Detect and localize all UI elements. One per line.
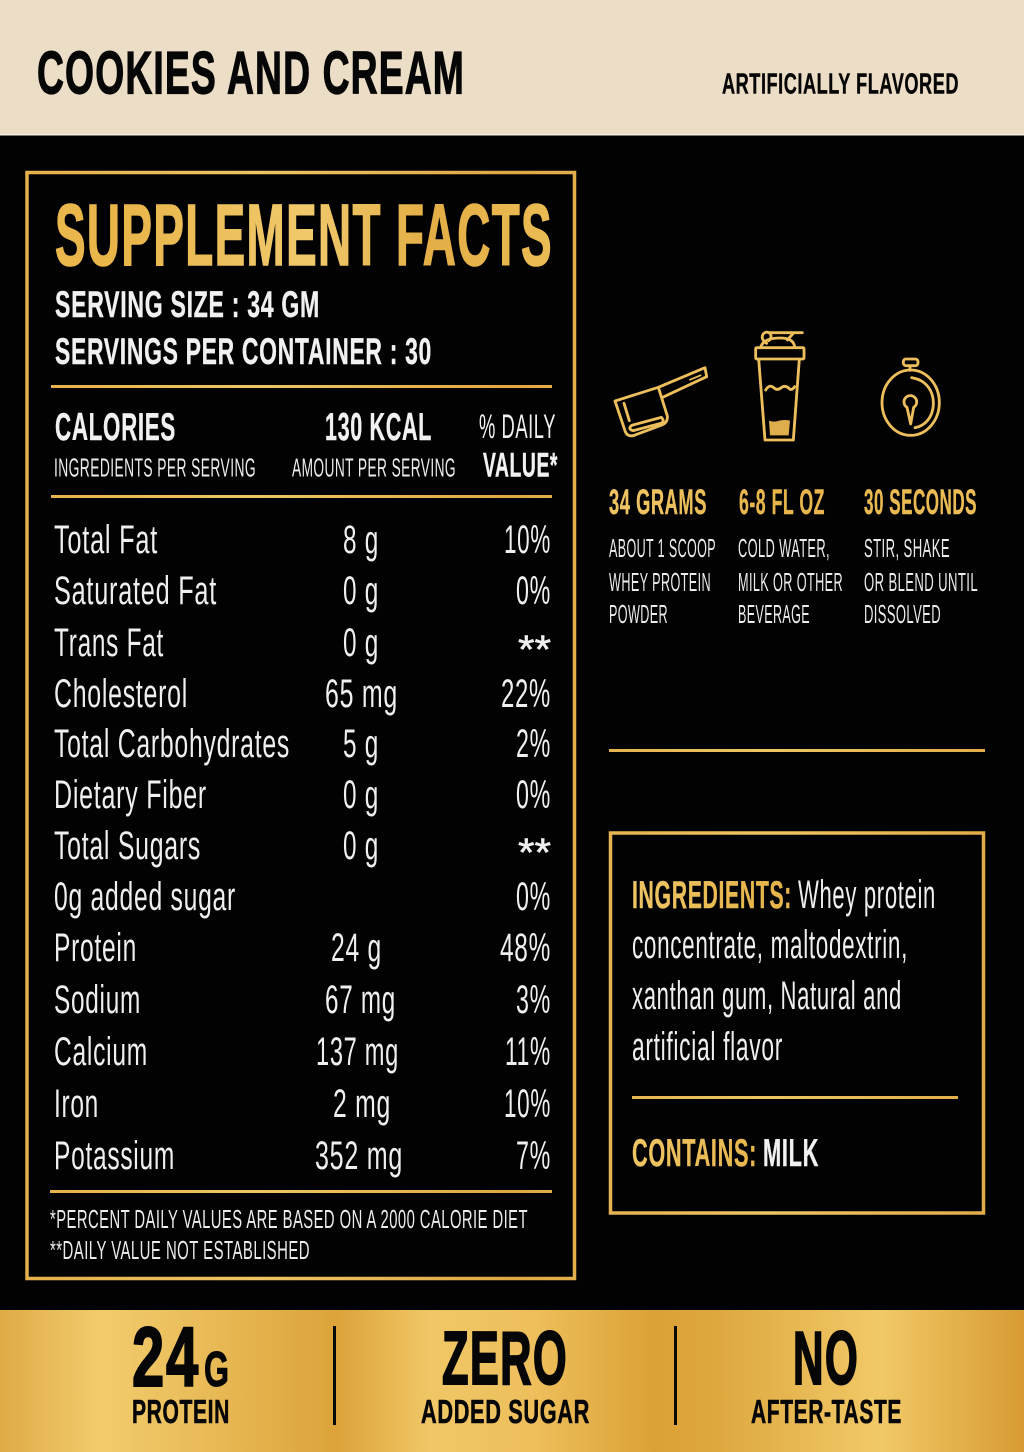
nutrient table: Protein	[54, 926, 137, 970]
panel: supplement facts	[27, 172, 574, 1278]
nutrient table: 10%	[504, 518, 551, 562]
step: 30 seconds	[864, 483, 978, 629]
nutrient table: Dietary Fiber	[54, 773, 207, 817]
contains allergen: MILK	[763, 1132, 819, 1175]
nutrient table: 24 g	[331, 926, 382, 970]
servings per container: SERVINGS PER CONTAINER : 30	[55, 331, 432, 372]
nutrient table: 22%	[501, 672, 551, 716]
ingredients label: INGREDIENTS:	[632, 874, 792, 917]
benefit: no after-taste: AFTER-TASTE	[751, 1393, 902, 1430]
table header row: AMOUNT PER SERVING	[292, 454, 456, 482]
nutrient table: 48%	[500, 926, 551, 970]
footnotes	[50, 1206, 528, 1265]
text: ABOUT 1 SCOOP	[609, 535, 716, 563]
step: 34 grams: 34 GRAMS	[609, 483, 707, 522]
nutrient table: 2 mg	[333, 1082, 391, 1126]
nutrient table: 0 g	[343, 621, 379, 665]
table header row: CALORIES	[55, 406, 176, 449]
nutrient table: Trans Fat	[54, 621, 164, 665]
step: 34 grams	[609, 483, 716, 629]
benefit: zero added sugar: ADDED SUGAR	[421, 1393, 590, 1430]
nutrient table: Sodium	[54, 978, 141, 1022]
text: MILK OR OTHER	[738, 569, 843, 597]
icon: shaker bottle	[756, 332, 804, 440]
nutrient table: 67 mg	[325, 978, 396, 1022]
nutrient table: 0 g	[343, 773, 379, 817]
nutrient table: 7%	[516, 1134, 551, 1178]
nutrient table: Cholesterol	[54, 672, 188, 716]
nutrient table: 5 g	[343, 722, 379, 766]
benefit: zero added sugar	[421, 1316, 590, 1430]
nutrient table: 352 mg	[315, 1134, 403, 1178]
benefit: 24g protein: G	[204, 1343, 230, 1397]
ingredients list: artificial flavor	[632, 1025, 783, 1069]
header band	[0, 0, 1024, 136]
serving size: SERVING SIZE : 34 GM	[55, 284, 320, 325]
benefit: no after-taste: NO	[793, 1316, 859, 1400]
nutrient table: 0%	[516, 773, 551, 817]
step: 6-8 fl oz: BEVERAGE	[738, 601, 810, 629]
nutrient table: 137 mg	[316, 1030, 399, 1074]
panel: ingredients	[610, 833, 984, 1213]
nutrient table: 2%	[516, 722, 551, 766]
nutrient table	[54, 518, 551, 1178]
benefit: no after-taste	[751, 1316, 902, 1430]
nutrient table: 0 g	[343, 569, 379, 613]
nutrient table: Calcium	[54, 1030, 148, 1074]
table header row: INGREDIENTS PER SERVING	[54, 454, 256, 482]
nutrient table: 0%	[516, 875, 551, 919]
nutrient table: Total Sugars	[54, 824, 201, 868]
contains allergen: CONTAINS:	[632, 1132, 757, 1175]
nutrient table: 0g added sugar	[54, 875, 236, 919]
nutrient table: Saturated Fat	[54, 569, 217, 613]
table header row: 130 KCAL	[325, 406, 432, 449]
heading: supplement facts: SUPPLEMENT FACTS	[55, 187, 553, 284]
table header row: VALUE*	[483, 446, 558, 484]
nutrient table: Total Carbohydrates	[54, 722, 290, 766]
benefit: 24g protein: PROTEIN	[132, 1393, 230, 1430]
benefit: zero added sugar: ZERO	[442, 1316, 568, 1400]
footnotes: *PERCENT DAILY VALUES ARE BASED ON A 2000 CALORIE DIET	[50, 1206, 528, 1234]
nutrient table: 65 mg	[325, 672, 398, 716]
step: 6-8 fl oz: COLD WATER,	[738, 535, 830, 563]
table header row: % DAILY	[479, 408, 556, 446]
nutrient table: Total Fat	[54, 518, 158, 562]
icon: scoop	[615, 368, 707, 436]
product flavor title: COOKIES AND CREAM	[37, 40, 465, 106]
nutrient table: 0%	[516, 569, 551, 613]
footnotes: **DAILY VALUE NOT ESTABLISHED	[50, 1237, 310, 1265]
step: 30 seconds: DISSOLVED	[864, 601, 941, 629]
ingredients list	[632, 873, 936, 1069]
nutrient table: 3%	[516, 978, 551, 1022]
preparation icons	[615, 332, 939, 440]
step: 6-8 fl oz: 6-8 FL OZ	[739, 483, 825, 522]
icon: stopwatch	[882, 359, 939, 435]
benefit: 24g protein: 24	[132, 1310, 200, 1404]
nutrient table: 8 g	[343, 518, 379, 562]
step: 34 grams: WHEY PROTEIN	[609, 569, 711, 597]
step: 34 grams: POWDER	[609, 601, 668, 629]
nutrient table: 0 g	[343, 824, 379, 868]
nutrient table: **	[518, 831, 551, 875]
nutrient table: **	[518, 628, 551, 672]
step: 6-8 fl oz	[738, 483, 843, 629]
table header row	[54, 406, 558, 484]
nutrient table: 11%	[505, 1030, 551, 1074]
nutrient table: 10%	[504, 1082, 551, 1126]
nutrient table: Potassium	[54, 1134, 175, 1178]
bottom benefits band	[0, 1310, 1024, 1452]
nutrient table: Iron	[54, 1082, 99, 1126]
